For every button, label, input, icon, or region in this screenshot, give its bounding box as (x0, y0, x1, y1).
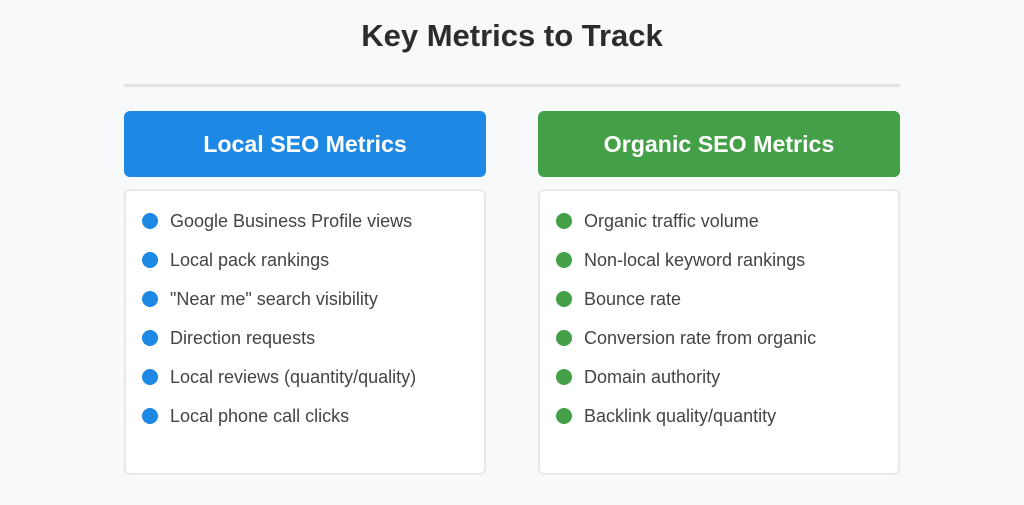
list item: Direction requests: Direction requests (170, 328, 315, 348)
heading: Organic SEO Metrics: Organic SEO Metrics (604, 131, 834, 157)
list item: Bounce rate: Bounce rate (584, 289, 681, 309)
list item: Local pack rankings: Local pack rankings (170, 250, 329, 270)
list item: Local reviews: Local reviews (quantity/quality) (170, 367, 416, 387)
list item: Google Business Profile views: Google Business Profile views (170, 211, 412, 231)
title: Key Metrics to Track (361, 18, 663, 53)
heading: Local SEO Metrics: Local SEO Metrics (203, 131, 407, 157)
heading: Organic SEO Metrics (538, 111, 900, 177)
list item: Domain authority: Domain authority (584, 367, 720, 387)
list item: Local phone call clicks: Local phone call clicks (170, 406, 349, 426)
list item: Conversion rate from organic: Conversion rate from organic (584, 328, 816, 348)
heading: Local SEO Metrics (124, 111, 486, 177)
list item: Backlink quality/quantity: Backlink quality/quantity (584, 406, 776, 426)
list item: Non-local keyword rankings: Non-local keyword rankings (584, 250, 805, 270)
panel: organic SEO metrics list (538, 189, 900, 475)
list item: Organic traffic volume: Organic traffic volume (584, 211, 759, 231)
panel: local SEO metrics list (124, 189, 486, 475)
list item: Near me search visibility: "Near me" search visibility (170, 289, 378, 309)
